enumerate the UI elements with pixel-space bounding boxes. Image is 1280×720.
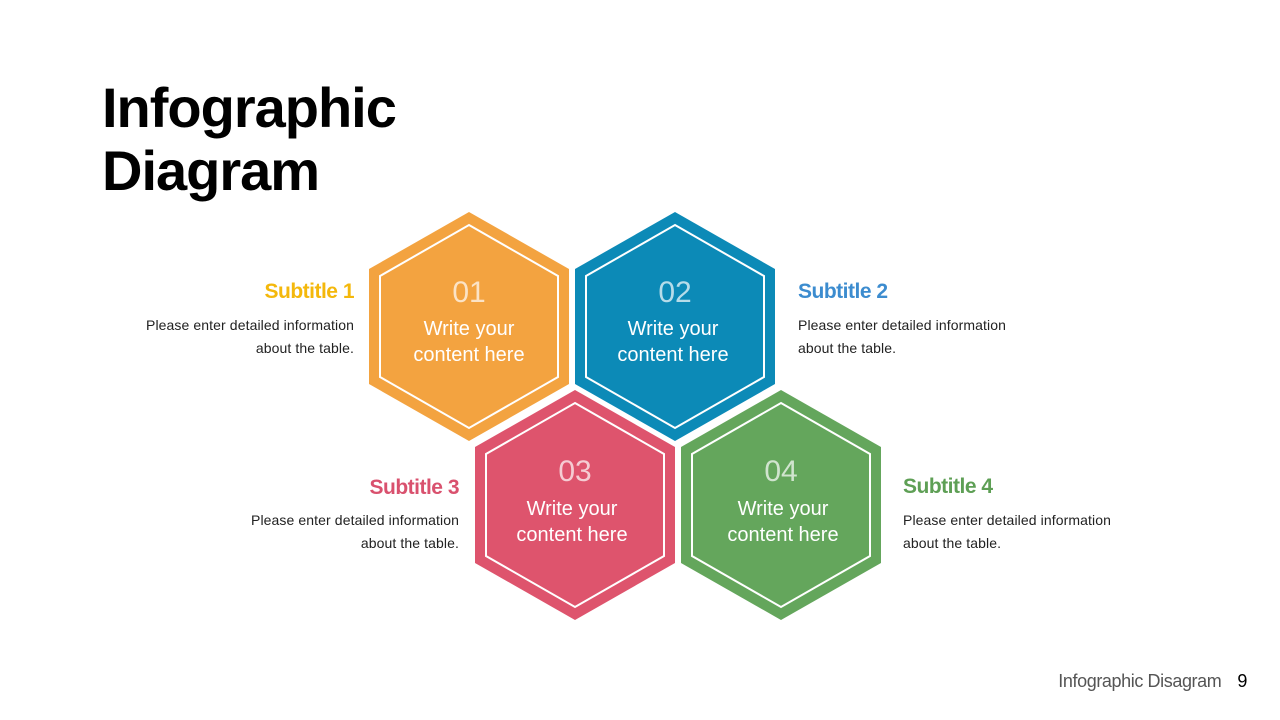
text block: subtitle 1: Subtitle 1 (264, 280, 354, 303)
hexagon 2: content here (617, 344, 729, 366)
text block: subtitle 1 (146, 280, 354, 356)
hexagon 4: 04 (764, 455, 798, 488)
hexagon 1: 01 (452, 276, 486, 309)
text block: subtitle 3: about the table. (361, 535, 459, 551)
hexagon 1 (369, 212, 569, 441)
hexagon 4 (681, 390, 881, 620)
hexagon 4: content here (727, 524, 839, 546)
text block: subtitle 1: about the table. (256, 340, 354, 356)
hexagon 3: content here (516, 524, 628, 546)
text block: subtitle 4: Please enter detailed information (903, 512, 1111, 528)
text block: subtitle 1: Please enter detailed information (146, 317, 354, 333)
hexagon 2: Write your (628, 318, 719, 340)
title: Infographic (102, 76, 396, 139)
text block: subtitle 2: about the table. (798, 340, 896, 356)
text block: subtitle 3: Please enter detailed information (251, 512, 459, 528)
hexagon 2: 02 (658, 276, 692, 309)
hexagon 3: 03 (558, 455, 592, 488)
hexagon 2 (575, 212, 775, 441)
hexagon 1: Write your (424, 318, 515, 340)
text block: subtitle 4 (903, 475, 1111, 551)
hexagon 4: Write your (738, 498, 829, 520)
text block: subtitle 2 (798, 280, 1006, 356)
hexagon 3 (475, 390, 675, 620)
hexagon 3: Write your (527, 498, 618, 520)
text block: subtitle 2: Subtitle 2 (798, 280, 888, 303)
text block: subtitle 4: Subtitle 4 (903, 475, 993, 498)
text block: subtitle 3 (251, 476, 459, 551)
text block: subtitle 3: Subtitle 3 (369, 476, 459, 499)
title: Diagram (102, 139, 319, 202)
footer: Infographic Disagram 9 (1058, 671, 1247, 691)
title (102, 76, 396, 202)
hexagon 1: content here (413, 344, 525, 366)
text block: subtitle 2: Please enter detailed information (798, 317, 1006, 333)
text block: subtitle 4: about the table. (903, 535, 1001, 551)
